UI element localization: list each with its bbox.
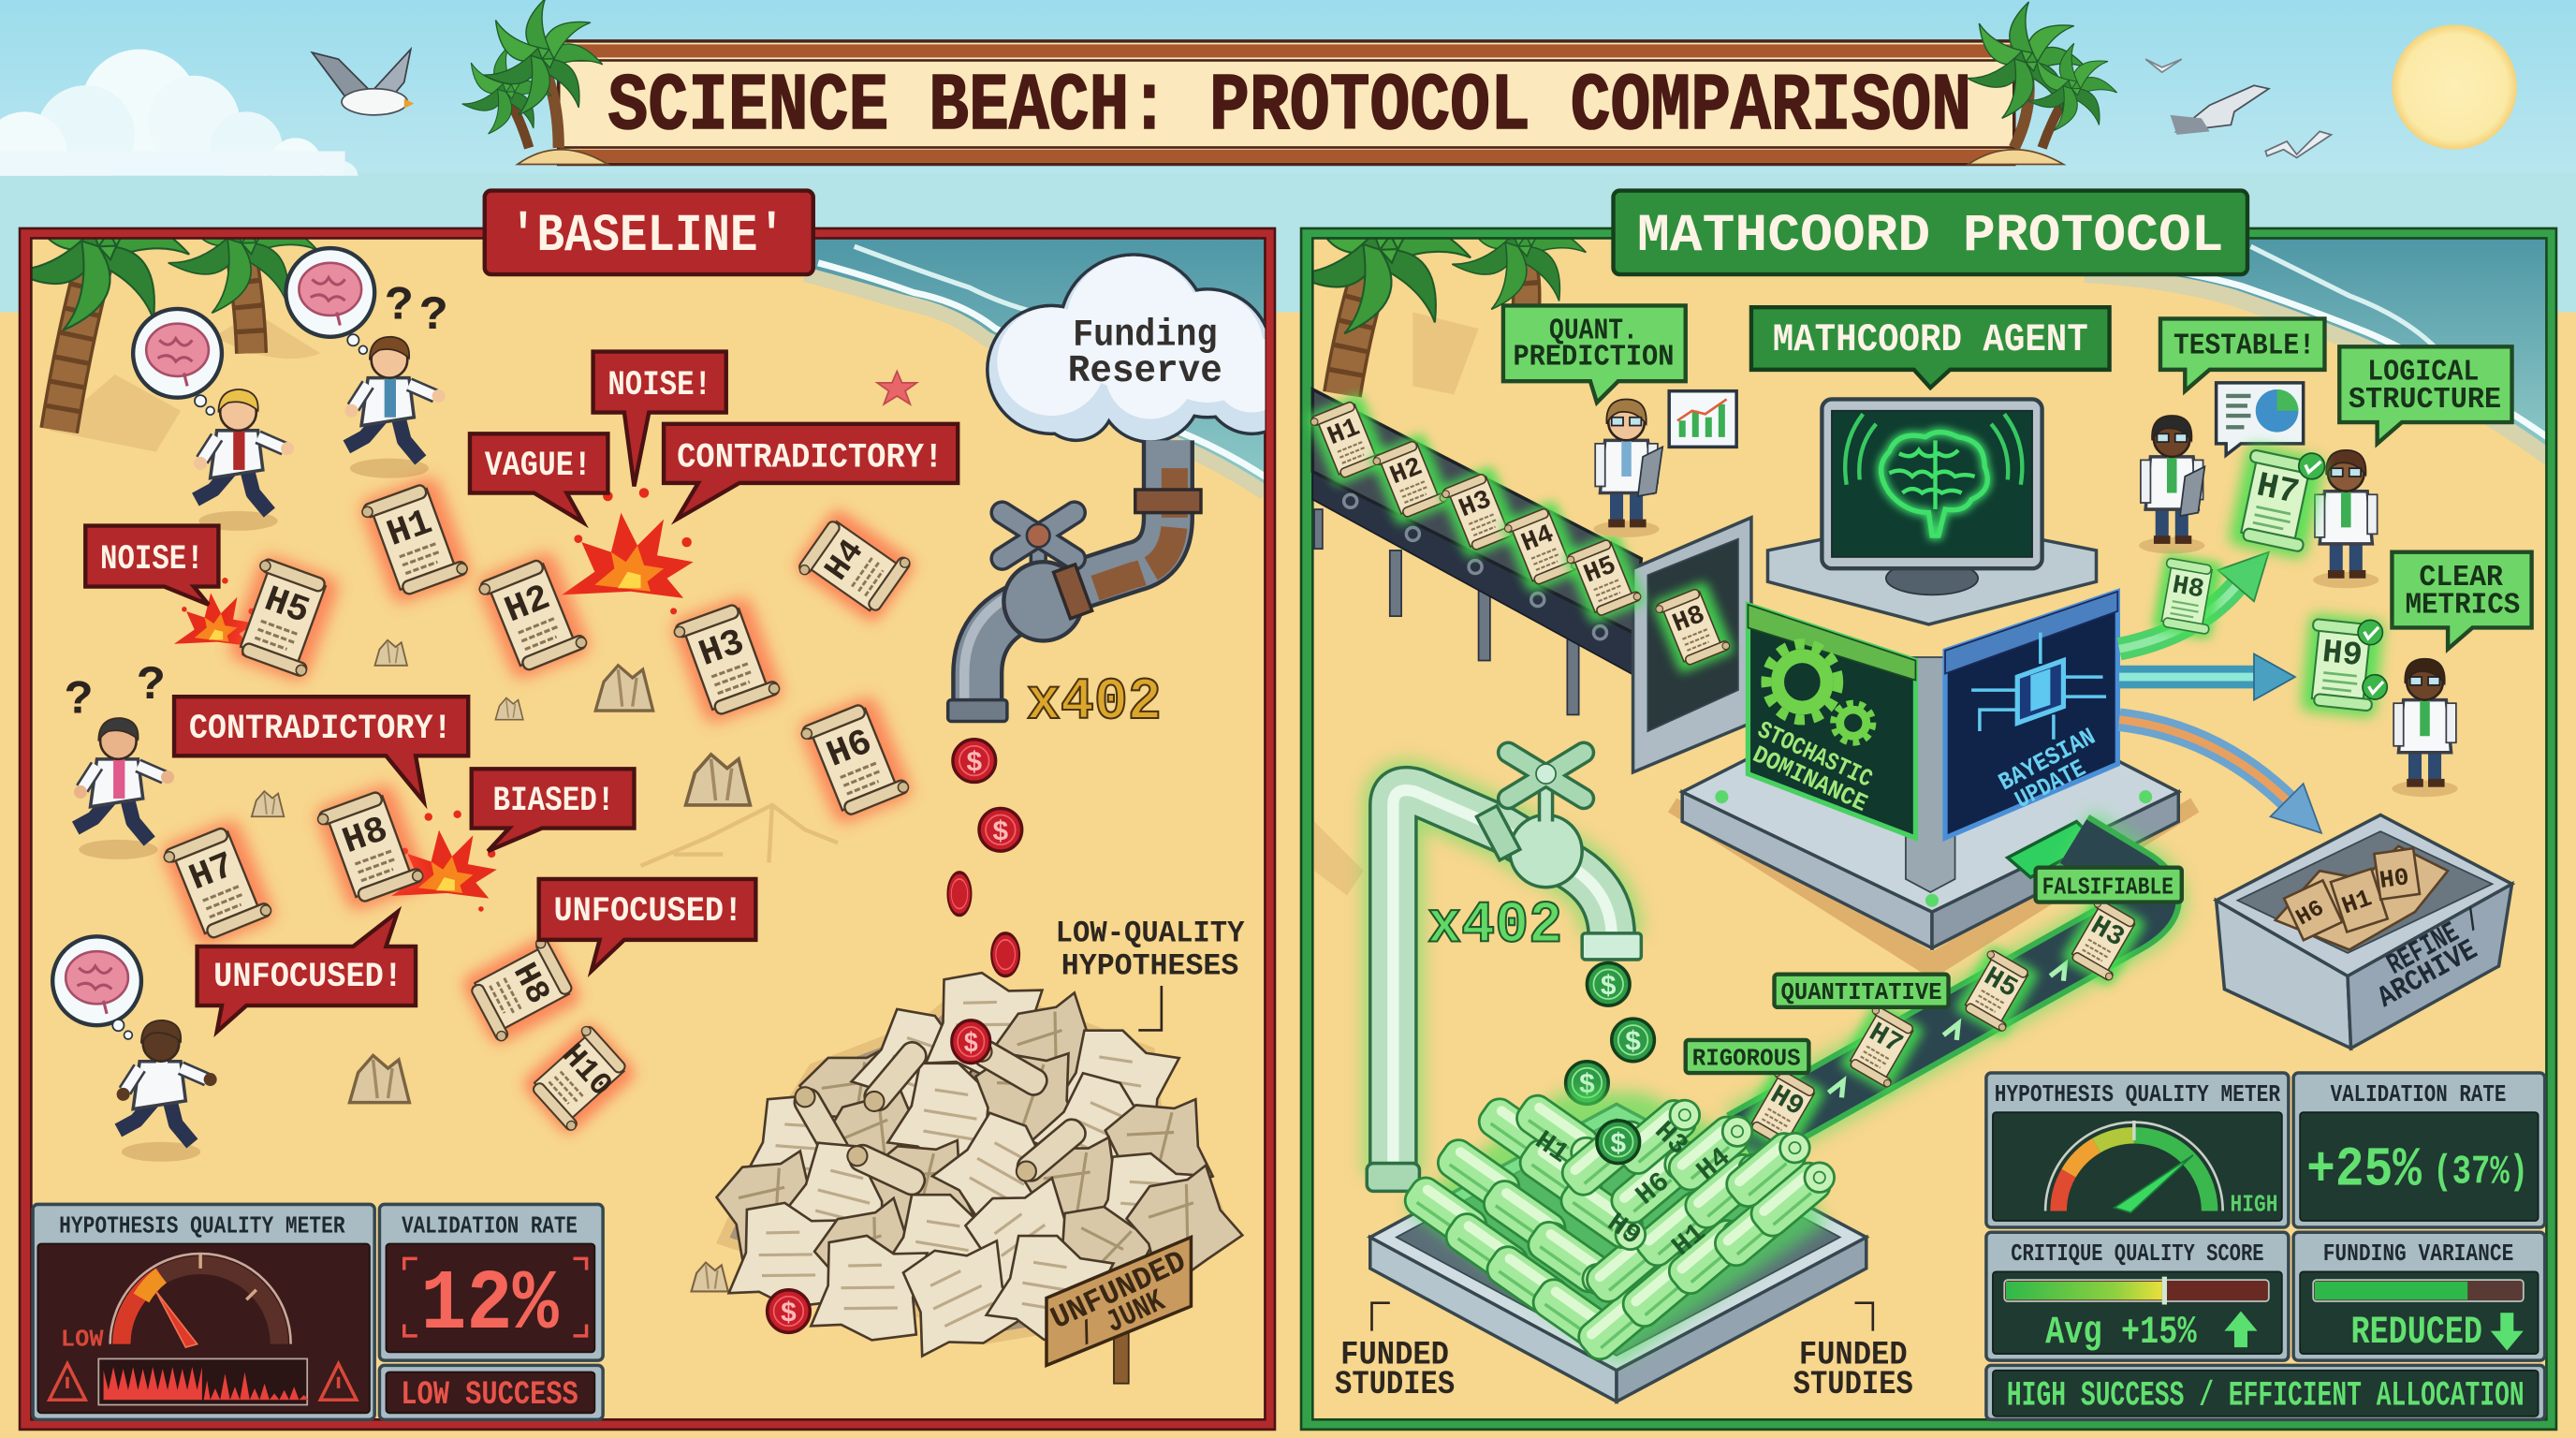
dashboard: baseline validation rate: VALIDATION RATE	[402, 1211, 578, 1240]
scroll H10: H10	[553, 1038, 619, 1105]
speech bubble: contradictory lower	[174, 697, 468, 801]
dashboard: validation rate high: +25%	[2306, 1137, 2422, 1201]
dashboard: low success	[379, 1365, 603, 1419]
speech bubble: noise top	[593, 352, 726, 486]
scientist logical structure	[2313, 450, 2378, 588]
scroll H3	[670, 594, 785, 726]
belt scroll H3: H3	[1455, 485, 1496, 524]
machine gate	[1633, 518, 1751, 772]
green funding pipe and faucet	[1367, 753, 1641, 1191]
speech bubble: testable: TESTABLE!	[2174, 330, 2315, 362]
dashboard: low success: LOW SUCCESS	[401, 1376, 578, 1414]
dashboard: validation rate high: (37%)	[2433, 1150, 2528, 1196]
falling red coins: $	[780, 1298, 797, 1329]
speech bubble: contradictory top	[664, 424, 958, 520]
speech bubble: noise top: NOISE!	[607, 366, 711, 405]
brain bubble 1	[133, 309, 222, 415]
brain bubble 2	[285, 248, 374, 354]
scientist clear metrics	[2392, 659, 2458, 797]
speech bubble: contradictory lower: CONTRADICTORY!	[189, 710, 452, 749]
accepted scroll H9: H9	[2320, 633, 2364, 675]
belt scroll H3	[1438, 465, 1521, 559]
pile of funded scrolls: H3	[1648, 1115, 1694, 1162]
scroll H8	[314, 782, 429, 913]
pile of funded scrolls: H1	[1529, 1124, 1574, 1170]
machine cube	[1748, 592, 2117, 892]
palm trees left of title	[461, 0, 607, 165]
beach sea, right panel	[1314, 240, 2546, 895]
funded studies label left	[1335, 1303, 1455, 1403]
accepted scroll H8	[2152, 553, 2223, 639]
refine archive bin: H0	[2378, 863, 2411, 895]
tag: falsifiable: FALSIFIABLE	[2042, 873, 2174, 902]
up arrow	[2224, 1312, 2258, 1347]
dashboard: baseline validation rate	[379, 1204, 603, 1360]
scroll H4	[793, 506, 917, 625]
sand dune marks	[640, 805, 838, 866]
refine archive bin	[2217, 814, 2512, 1049]
speech bubble: noise left	[85, 526, 218, 605]
scroll H2	[475, 550, 593, 682]
funding reserve text: Funding	[1073, 315, 1218, 358]
bayesian update face: BAYESIAN	[1994, 723, 2100, 797]
refine archive bin: ARCHIVE	[2373, 934, 2483, 1016]
belt scroll H4: H4	[1517, 520, 1559, 559]
arrow: green accepted	[2119, 552, 2269, 649]
scientist with tablet, left	[1593, 399, 1662, 537]
speech bubble: biased	[472, 769, 634, 851]
beach sea, left panel	[32, 240, 1264, 499]
brain bubble 3	[52, 936, 141, 1039]
scientist 3	[74, 718, 174, 859]
seagull left	[312, 50, 414, 115]
belt scroll H5: H5	[1580, 550, 1620, 590]
stochastic dominance face	[1748, 605, 1915, 838]
speech bubble: unfocused right	[539, 879, 755, 971]
falling red coins: $	[992, 816, 1009, 848]
arrow: to archive	[2119, 720, 2321, 833]
falling green coins	[1566, 962, 1654, 1104]
scroll H4: H4	[817, 533, 872, 588]
seagulls right	[2145, 59, 2331, 157]
belt scroll H7 lower: H7	[1864, 1017, 1908, 1061]
explosions	[174, 488, 694, 912]
rocks	[252, 640, 750, 1291]
title banner	[559, 41, 2014, 165]
pile of funded scrolls	[1399, 1089, 1842, 1365]
green conveyor to funding	[1741, 842, 2151, 1140]
rusty pipe and faucet	[948, 440, 1201, 721]
low-quality hypotheses label	[1056, 917, 1245, 1030]
scientist 1	[194, 389, 294, 531]
belt scroll H4	[1500, 500, 1584, 594]
question marks: ?	[385, 280, 414, 333]
panel: baseline	[7, 155, 1275, 1430]
speech bubble: mathcoord agent	[1751, 307, 2110, 388]
dashboard: quality meter high: HYPOTHESIS QUALITY METER	[1995, 1080, 2280, 1108]
scroll H5: H5	[259, 579, 315, 633]
falling red coins	[768, 740, 1022, 1332]
bayesian update face	[1945, 592, 2117, 838]
accepted scroll H7: H7	[2253, 466, 2303, 514]
header: mathcoord protocol	[1614, 191, 2247, 274]
icon: pie chart bubble	[2217, 383, 2304, 455]
scroll H6: H6	[821, 721, 878, 777]
low-quality hypotheses label: LOW-QUALITY	[1056, 917, 1245, 951]
dashboard: funding variance: FUNDING VARIANCE	[2323, 1240, 2513, 1268]
scroll H8: H8	[337, 809, 393, 863]
belt scroll H3 lower: H3	[2086, 910, 2130, 954]
palm trees right of title	[1965, 2, 2117, 165]
speech bubble: contradictory top: CONTRADICTORY!	[677, 438, 943, 477]
dashboard: validation rate high	[2293, 1073, 2545, 1227]
dashboard: funding variance	[2293, 1232, 2545, 1360]
waveform	[98, 1358, 309, 1405]
arrow: teal straight	[2119, 654, 2295, 700]
belt scroll H2	[1368, 433, 1453, 526]
pile of funded scrolls: H9	[1602, 1207, 1647, 1252]
pile of funded scrolls: H1	[1666, 1217, 1712, 1263]
funded studies label left: FUNDED	[1340, 1337, 1449, 1374]
pile of funded scrolls: H4	[1690, 1141, 1736, 1187]
speech bubble: biased: BIASED!	[493, 782, 614, 821]
scroll H10	[520, 1020, 638, 1137]
funded studies label right: STUDIES	[1793, 1366, 1913, 1403]
sign: unfunded junk: / JUNK	[1074, 1284, 1171, 1355]
dashboard: baseline quality meter: LOW	[61, 1325, 104, 1353]
scroll H7: H7	[183, 844, 241, 900]
belt scroll H3 lower	[2060, 893, 2147, 987]
belt scroll H5	[1562, 531, 1647, 625]
header: baseline: 'BASELINE'	[509, 206, 785, 266]
dashboard: critique quality score	[1986, 1232, 2289, 1360]
scroll H7	[159, 817, 277, 949]
tag: rigorous: RIGOROUS	[1692, 1044, 1801, 1072]
funded studies label right	[1793, 1303, 1913, 1403]
question marks: ?	[137, 660, 166, 713]
dashboard: quality meter high: HIGH	[2231, 1190, 2277, 1218]
title text: SCIENCE BEACH: PROTOCOL COMPARISON	[607, 61, 1971, 153]
scroll H3: H3	[694, 621, 750, 676]
gauge	[110, 1254, 291, 1347]
refine archive bin: H1	[2338, 884, 2376, 920]
tag: falsifiable	[2036, 868, 2182, 902]
sun	[2392, 24, 2517, 150]
sign: unfunded junk: UNFUNDED	[1046, 1244, 1192, 1338]
funded studies tray	[1370, 1104, 1866, 1401]
belt scroll H5 lower: H5	[1979, 961, 2023, 1005]
speech bubble: clear metrics: CLEAR	[2419, 562, 2503, 594]
belt scroll H9: H9	[1765, 1078, 1809, 1123]
speech bubble: logical structure: LOGICAL	[2367, 356, 2479, 389]
speech bubble: mathcoord agent: MATHCOORD AGENT	[1773, 317, 2088, 362]
speech bubble: logical structure	[2339, 346, 2512, 444]
belt scroll H8	[1651, 580, 1735, 674]
funding reserve text	[1070, 316, 1221, 382]
speech bubble: testable	[2160, 318, 2324, 391]
belt scroll H5 lower	[1954, 945, 2041, 1038]
falling green coins: $	[1600, 971, 1617, 1003]
speech bubble: clear metrics	[2392, 552, 2532, 649]
speech bubble: logical structure: STRUCTURE	[2349, 384, 2501, 417]
question marks: ?	[419, 290, 448, 344]
refine archive bin: H6	[2292, 896, 2329, 932]
scroll H6	[797, 694, 915, 827]
scroll H2: H2	[499, 577, 556, 632]
header: mathcoord protocol: MATHCOORD PROTOCOL	[1637, 206, 2224, 266]
belt scroll H8: H8	[1669, 600, 1709, 639]
scientist 2	[345, 337, 446, 478]
panel: mathcoord	[1289, 158, 2556, 1430]
belt scroll H2: H2	[1386, 452, 1427, 492]
scientist testable	[2139, 416, 2204, 553]
speech bubble: vague: VAGUE!	[485, 447, 592, 486]
funded studies label right: FUNDED	[1799, 1337, 1908, 1374]
pile of funded scrolls: H6	[1630, 1166, 1676, 1211]
x402 multiplier left: x402	[1027, 668, 1162, 736]
tag: quantitative: QUANTITATIVE	[1781, 978, 1942, 1006]
conveyor belt	[1312, 389, 1673, 714]
falling green coins: $	[1578, 1069, 1595, 1101]
monitor with neon brain	[1822, 399, 2042, 594]
warning icons	[50, 1364, 357, 1400]
accepted scroll H9	[2300, 613, 2394, 719]
speech bubble: unfocused right: UNFOCUSED!	[553, 892, 742, 932]
pile of funded scrolls: $	[1610, 1128, 1627, 1160]
speech bubble: quant prediction: QUANT.	[1549, 315, 1638, 348]
falling red coins: $	[966, 747, 983, 779]
scroll H1	[358, 475, 473, 606]
belt scroll H7 lower	[1838, 1001, 1925, 1093]
down arrow	[2491, 1313, 2524, 1351]
x402 multiplier right: x402	[1427, 892, 1562, 960]
dashboard: critique quality score: CRITIQUE QUALITY SCORE	[2011, 1240, 2264, 1268]
refine archive bin: REFINE /	[2382, 904, 2487, 983]
funding reserve text: Reserve	[1068, 350, 1222, 393]
belt scroll H1	[1306, 393, 1390, 487]
speech bubble: quant prediction	[1503, 305, 1686, 403]
falling red coins: $	[963, 1028, 978, 1061]
machine top plate	[1767, 518, 2097, 624]
gauge high	[2045, 1121, 2223, 1212]
dashboard: baseline quality meter: HYPOTHESIS QUALITY METER	[59, 1211, 345, 1240]
speech bubble: clear metrics: METRICS	[2405, 590, 2520, 623]
belt scroll H1: H1	[1324, 413, 1364, 452]
scroll H8 lower	[460, 933, 583, 1047]
dashboard: quality meter high	[1986, 1073, 2289, 1227]
speech bubble: quant prediction: PREDICTION	[1513, 342, 1674, 374]
accepted scroll H7	[2228, 440, 2327, 560]
scientist 4	[117, 1020, 217, 1162]
starfish	[877, 372, 916, 404]
scroll H5	[227, 552, 342, 683]
low-quality hypotheses label: HYPOTHESES	[1061, 949, 1238, 984]
accepted scroll H8: H8	[2170, 570, 2206, 606]
funded studies label left: STUDIES	[1335, 1366, 1455, 1403]
question marks	[65, 280, 448, 728]
scroll H1: H1	[382, 501, 438, 556]
bayesian update face: UPDATE	[2011, 755, 2090, 814]
dashboard: validation rate high: VALIDATION RATE	[2331, 1080, 2506, 1108]
sky cloud	[0, 49, 358, 176]
dashboard: funding variance: REDUCED	[2351, 1310, 2482, 1355]
sign: unfunded junk	[1046, 1238, 1192, 1384]
falling green coins: $	[1625, 1026, 1642, 1058]
dashboard: high success	[1986, 1365, 2545, 1419]
machine base	[1673, 666, 2195, 969]
stochastic dominance face: STOCHASTIC	[1753, 716, 1877, 794]
header: baseline	[485, 191, 813, 274]
speech bubble: vague	[470, 433, 607, 522]
dashboard: critique quality score: Avg +15%	[2045, 1310, 2197, 1355]
speech bubble: noise left: NOISE!	[100, 540, 204, 580]
funding reserve cloud	[989, 257, 1298, 440]
speech bubble: unfocused left: UNFOCUSED!	[213, 958, 402, 997]
belt scroll H9	[1740, 1063, 1827, 1156]
icon: chart bubble	[1669, 391, 1736, 447]
dashboard: baseline validation rate: 12%	[420, 1257, 559, 1354]
speech bubble: unfocused left	[198, 912, 416, 1032]
paper pile	[707, 966, 1249, 1359]
scroll H8 lower: H8	[505, 957, 558, 1010]
question marks: ?	[65, 675, 94, 728]
dashboard: baseline quality meter	[33, 1204, 374, 1419]
stochastic dominance face: DOMINANCE	[1749, 741, 1872, 818]
output slot	[2008, 822, 2097, 877]
